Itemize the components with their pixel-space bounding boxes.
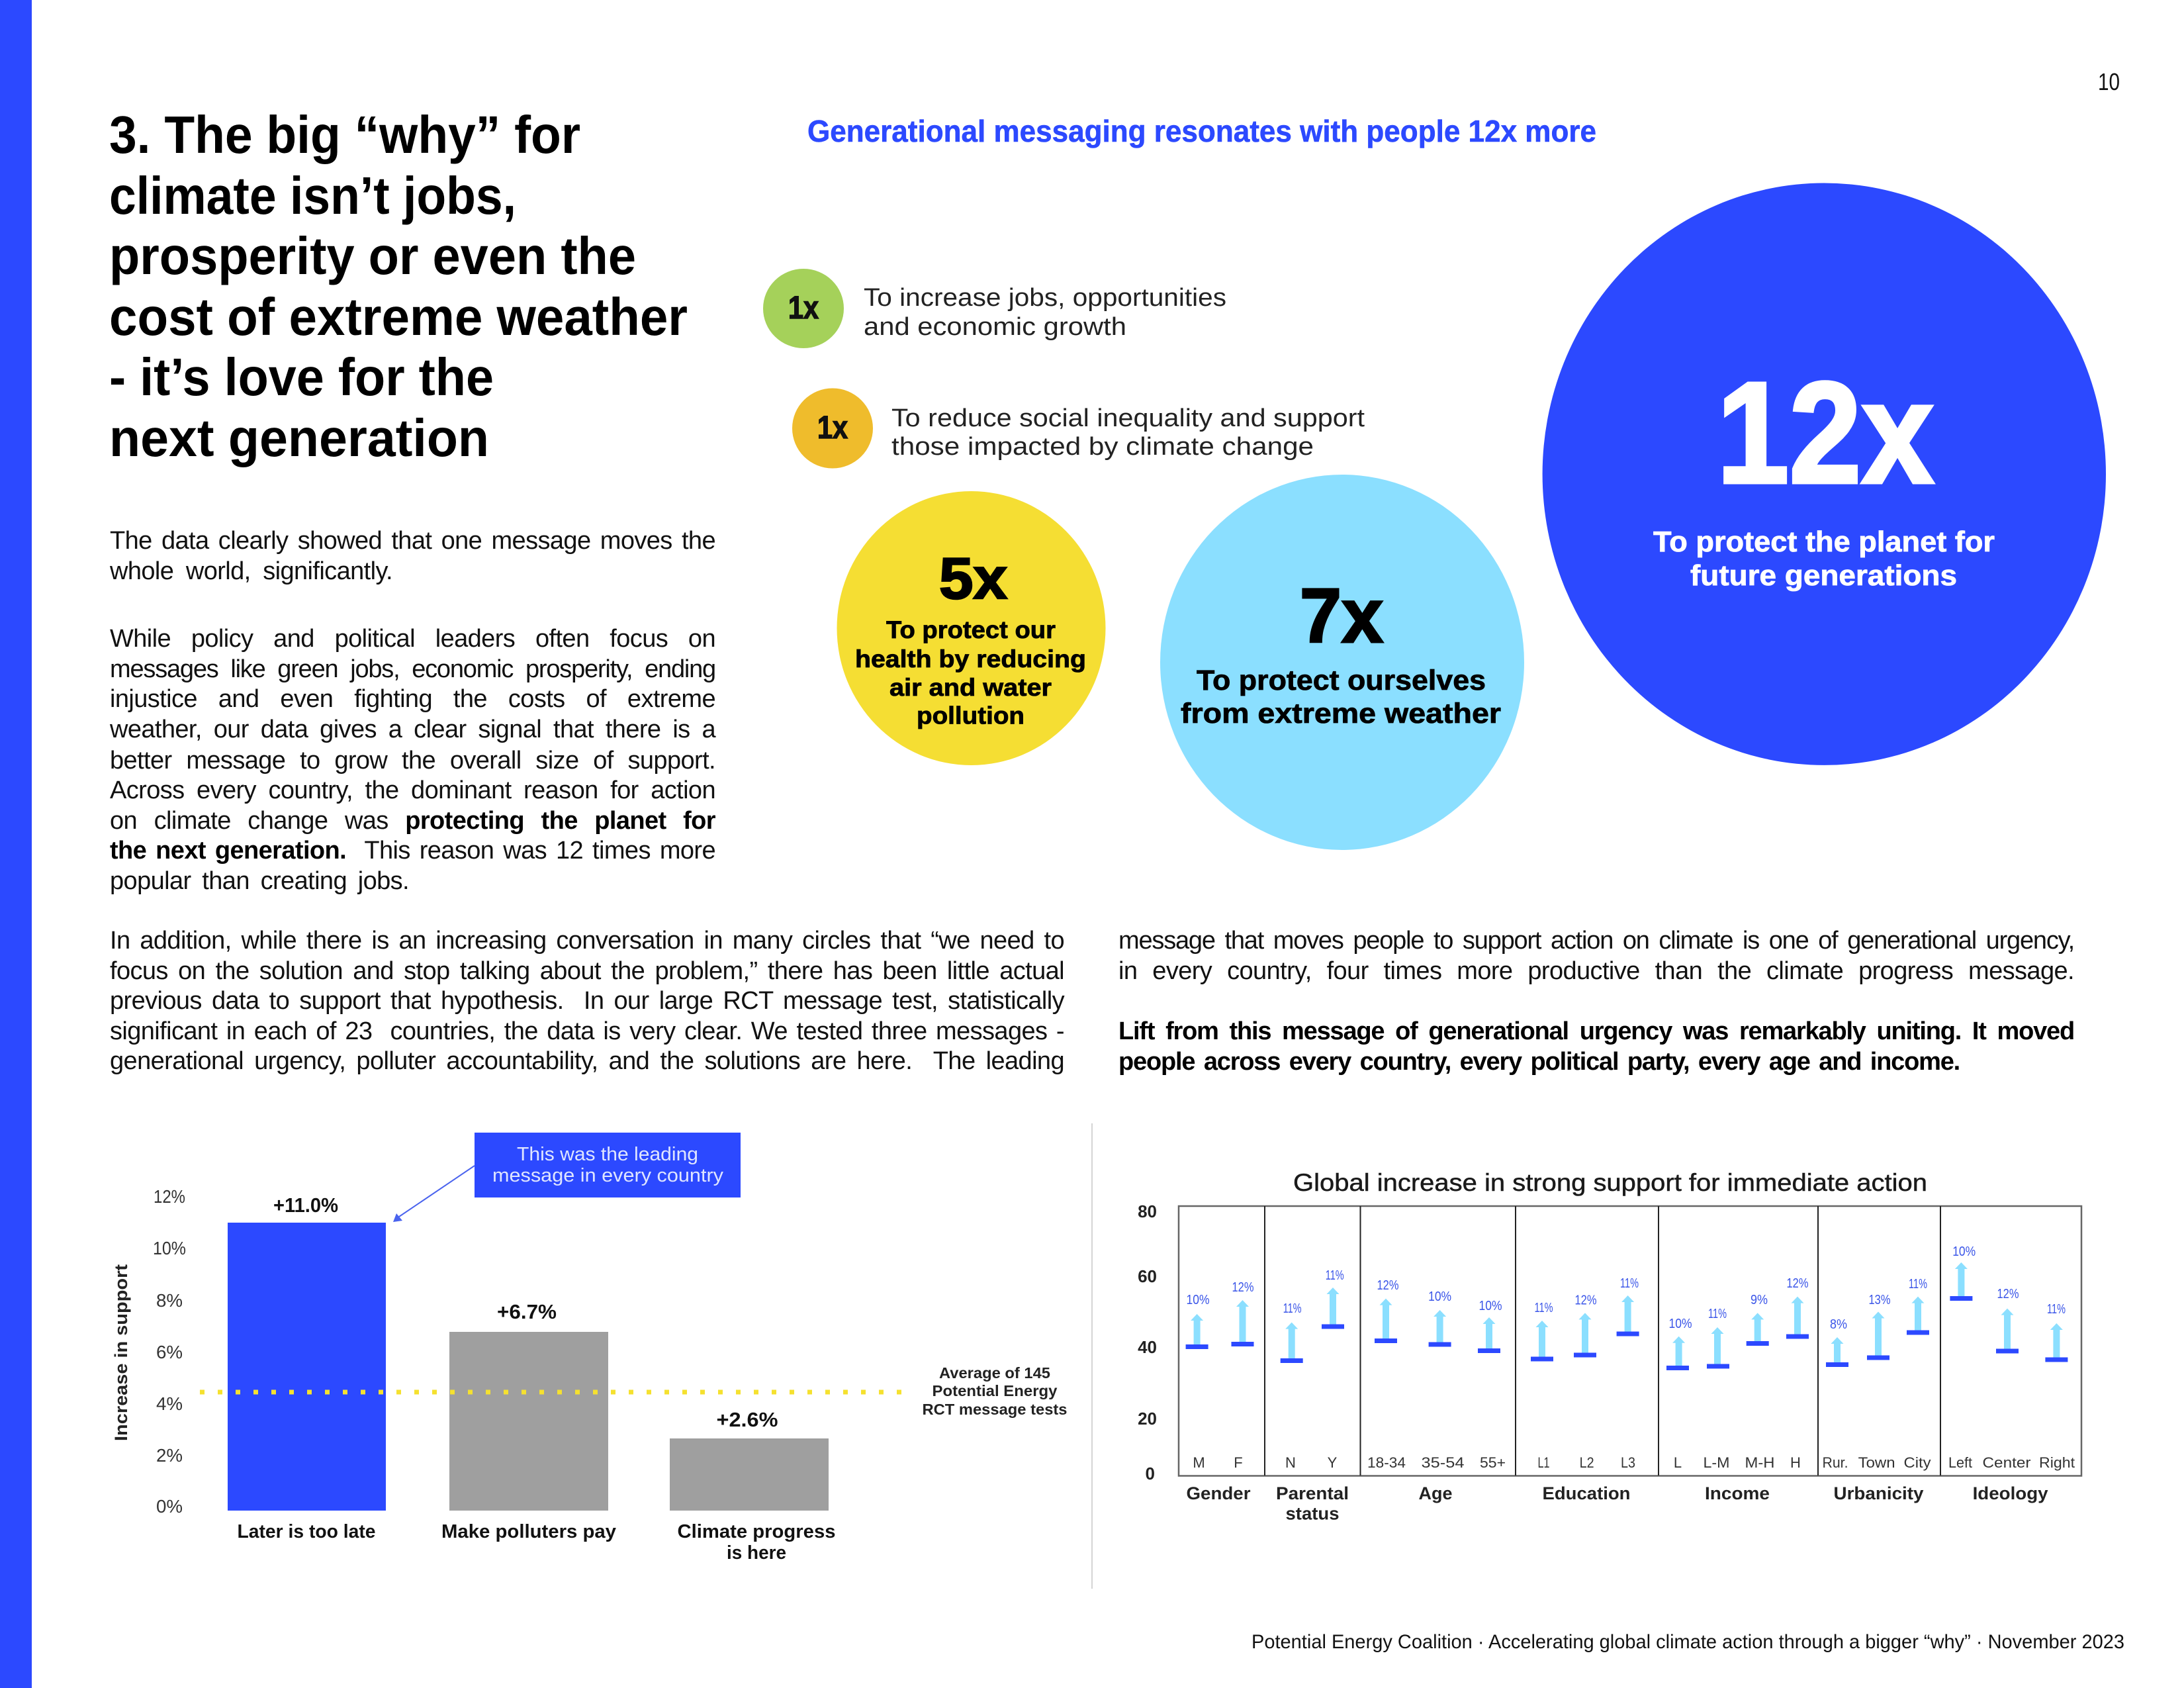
category labels: Right [2039, 1454, 2075, 1471]
category labels: Town [1858, 1454, 1895, 1471]
bubble: 1x inequality [792, 388, 873, 469]
text block: RCT paragraph left column: previous data to support that hypothesis. In our large RCT message test, statistically [110, 987, 1064, 1015]
increase percentages: 11% [1708, 1307, 1727, 1321]
group labels: Age [1419, 1483, 1452, 1503]
label: jobs message: and economic growth [864, 313, 1126, 341]
label: inequality message: those impacted by climate change [891, 433, 1314, 461]
bubble: 12x future generations: 12x [1717, 353, 1934, 514]
text block: RCT paragraph left column: In addition, while there is an increasing conversation in many circles that “we need to [110, 927, 1064, 955]
group labels: Parental [1276, 1483, 1349, 1503]
text block: intro paragraph [110, 527, 715, 585]
category labels: M-H [1745, 1454, 1775, 1471]
text block: policy leaders paragraph: messages like green jobs, economic prosperity, ending [110, 655, 715, 683]
arrows [1191, 1262, 2063, 1368]
bar labels: Make polluters pay [441, 1521, 616, 1542]
text block: policy leaders paragraph: injustice and even fighting the costs of extreme [110, 685, 715, 713]
text block: intro paragraph: whole world, significantly. [110, 557, 392, 585]
average label: RCT message tests [923, 1401, 1067, 1418]
y axis labels: 0% [156, 1496, 183, 1517]
increase percentages: 11% [1620, 1276, 1639, 1291]
group labels: status [1285, 1504, 1340, 1524]
text block: policy leaders paragraph [110, 625, 716, 895]
increase percentages: 10% [1952, 1244, 1976, 1259]
callout: leading message: message in every country [492, 1165, 724, 1186]
increase percentages: 12% [1377, 1278, 1399, 1293]
y axis title: Increase in support [111, 1264, 131, 1441]
y axis labels: 0 [1146, 1464, 1155, 1483]
baseline markers [1186, 1296, 2068, 1370]
title: - it’s love for the [109, 348, 494, 406]
increase percentages: 13% [1869, 1293, 1891, 1307]
group labels: Education [1542, 1483, 1631, 1503]
title [109, 105, 688, 467]
label: jobs message: To increase jobs, opportunities [864, 284, 1226, 312]
bar labels [237, 1521, 835, 1564]
average label [923, 1364, 1067, 1418]
category labels: Y [1328, 1454, 1338, 1471]
text block: RCT paragraph left column: generational urgency, polluter accountability, and the solutions are here. The leading [110, 1047, 1064, 1075]
bubble: 7x extreme weather [1160, 475, 1524, 850]
text block: bold conclusion: people across every country, every political party, every age and income. [1118, 1048, 1960, 1076]
increase percentages: 10% [1186, 1293, 1210, 1307]
bubble: 1x jobs: 1x [788, 291, 819, 326]
category labels: Left [1948, 1454, 1972, 1471]
text block: RCT paragraph right column: message that moves people to support action on climate is one of generational urgency, [1118, 927, 2074, 955]
bar values: +6.7% [497, 1300, 557, 1323]
bubble: 12x future generations [1543, 183, 2106, 765]
increase percentages: 10% [1479, 1299, 1502, 1313]
bubble: 7x extreme weather: from extreme weather [1181, 698, 1501, 729]
arrow: callout to bar [393, 1166, 475, 1222]
average line [200, 1390, 901, 1394]
text block: RCT paragraph left column: significant in each of 23 countries, the data is very clear. We tested three messages - [110, 1017, 1064, 1045]
bubble: 1x inequality: 1x [817, 410, 848, 445]
bar labels: Climate progress [678, 1521, 835, 1542]
category labels: L1 [1538, 1454, 1550, 1471]
category labels: 35-54 [1422, 1454, 1464, 1471]
callout: leading message: This was the leading [517, 1144, 698, 1165]
y axis labels: 12% [154, 1186, 185, 1207]
increase percentages: 10% [1428, 1289, 1451, 1304]
category labels: H [1790, 1454, 1801, 1471]
page number: 10 [2098, 68, 2120, 95]
bubble: 12x future generations: future generations [1690, 559, 1957, 592]
bar labels: is here [727, 1542, 786, 1564]
y axis labels: 20 [1138, 1409, 1157, 1429]
title: cost of extreme weather [109, 287, 688, 346]
y axis labels: 6% [156, 1342, 183, 1362]
text block: policy leaders paragraph: better message to grow the overall size of support. [110, 747, 715, 774]
text block: policy leaders paragraph: the next generation. This reason was 12 times more [110, 837, 715, 865]
increase percentages: 11% [1326, 1268, 1344, 1283]
plot frame and group dividers [1179, 1206, 2081, 1476]
y axis labels: 10% [153, 1238, 186, 1258]
bar: make polluters pay [449, 1332, 608, 1511]
sidebar: blue accent strip [0, 0, 32, 1688]
increase percentages: 11% [2047, 1302, 2066, 1317]
heading: generational messaging: Generational messaging resonates with people 12x more [807, 114, 1596, 148]
title: 3. The big “why” for [109, 105, 580, 164]
category labels: 55+ [1480, 1454, 1506, 1471]
group labels: Urbanicity [1833, 1483, 1923, 1503]
label: inequality message: To reduce social inequality and support [891, 404, 1365, 432]
increase percentages: 11% [1283, 1301, 1302, 1316]
category labels: L3 [1621, 1454, 1635, 1471]
increase percentages: 11% [1534, 1301, 1553, 1315]
average label: Average of 145 [939, 1364, 1050, 1382]
category labels: 18-34 [1367, 1454, 1406, 1471]
bubble: 5x health [837, 491, 1105, 765]
category labels: F [1234, 1454, 1243, 1471]
text block: policy leaders paragraph: on climate change was protecting the planet for [110, 807, 715, 835]
y axis labels: 2% [156, 1445, 183, 1466]
increase percentages: 10% [1669, 1317, 1692, 1331]
bubble: 5x health: pollution [917, 702, 1024, 729]
category labels: Rur. [1823, 1454, 1848, 1471]
category labels: L2 [1580, 1454, 1594, 1471]
bar values: +2.6% [716, 1408, 778, 1431]
increase percentages: 12% [1232, 1280, 1254, 1295]
label: inequality message [891, 404, 1365, 461]
bar chart: message test results [111, 1186, 1067, 1564]
bubble: 1x jobs [763, 269, 844, 348]
group labels: Ideology [1973, 1483, 2048, 1503]
y axis labels: 60 [1138, 1266, 1157, 1286]
text block: policy leaders paragraph: weather, our data gives a clear signal that there is a [110, 716, 715, 743]
text block: bold conclusion: Lift from this message of generational urgency was remarkably uniting. It moved [1118, 1017, 2074, 1045]
y axis labels: 4% [156, 1393, 183, 1414]
category labels: L-M [1704, 1454, 1730, 1471]
group labels [1186, 1483, 2048, 1524]
category labels: City [1903, 1454, 1931, 1471]
y axis labels: 80 [1138, 1201, 1157, 1221]
text block: RCT paragraph left column: focus on the solution and stop talking about the problem,” there has been little actual [110, 957, 1064, 985]
bar: later is too late [228, 1223, 386, 1511]
title: climate isn’t jobs, [109, 166, 516, 225]
y axis labels: 8% [156, 1290, 183, 1311]
text block: policy leaders paragraph: While policy and political leaders often focus on [110, 625, 715, 653]
callout: leading message [475, 1133, 741, 1197]
category labels: N [1285, 1454, 1296, 1471]
increase percentages: 12% [1997, 1287, 2019, 1301]
bar labels: Later is too late [237, 1521, 376, 1542]
average label: Potential Energy [932, 1382, 1058, 1399]
bubble: 7x extreme weather: To protect ourselves [1197, 665, 1486, 696]
bubble: 5x health: To protect our [886, 616, 1056, 643]
y axis labels [153, 1186, 186, 1517]
bubble: 12x future generations: To protect the planet for [1653, 526, 1995, 558]
group labels: Gender [1186, 1483, 1251, 1503]
category labels: M [1193, 1454, 1205, 1471]
increase percentages: 12% [1787, 1276, 1809, 1291]
increase percentages [1186, 1244, 2066, 1332]
title: next generation [109, 408, 489, 467]
bar: climate progress is here [670, 1438, 829, 1511]
increase percentages: 11% [1909, 1277, 1927, 1291]
category labels: L [1674, 1454, 1682, 1471]
text block: RCT paragraph left column [110, 927, 1064, 1075]
footer: Potential Energy Coalition · Accelerating global climate action through a bigger “why” · November 2023 [1251, 1631, 2124, 1653]
bubble: 5x health: 5x [939, 545, 1007, 611]
label: jobs message [864, 284, 1226, 341]
text block: bold conclusion [1118, 1017, 2074, 1076]
increase percentages: 9% [1751, 1293, 1768, 1307]
chart title: Global increase in strong support for immediate action [1293, 1169, 1927, 1196]
text block: RCT paragraph right column: in every country, four times more productive than the climate progress message. [1118, 957, 2074, 985]
category labels [1193, 1454, 2075, 1471]
chart: global increase in strong support [1138, 1169, 2081, 1524]
text block: RCT paragraph right column [1118, 927, 2074, 985]
text block: policy leaders paragraph: popular than creating jobs. [110, 867, 409, 895]
bar values [273, 1194, 778, 1431]
text block: intro paragraph: The data clearly showed that one message moves the [110, 527, 715, 555]
bubble: 5x health: air and water [889, 674, 1052, 701]
y axis labels: 40 [1138, 1337, 1157, 1357]
category labels: Center [1983, 1454, 2030, 1471]
bubble: 7x extreme weather: 7x [1300, 573, 1383, 659]
y axis labels [1138, 1201, 1157, 1483]
group labels: Income [1705, 1483, 1770, 1503]
title: prosperity or even the [109, 226, 636, 285]
bubble: 5x health: health by reducing [855, 645, 1086, 673]
bar values: +11.0% [273, 1194, 338, 1217]
increase percentages: 8% [1830, 1317, 1847, 1332]
text block: policy leaders paragraph: Across every country, the dominant reason for action [110, 776, 715, 804]
increase percentages: 12% [1575, 1293, 1597, 1308]
